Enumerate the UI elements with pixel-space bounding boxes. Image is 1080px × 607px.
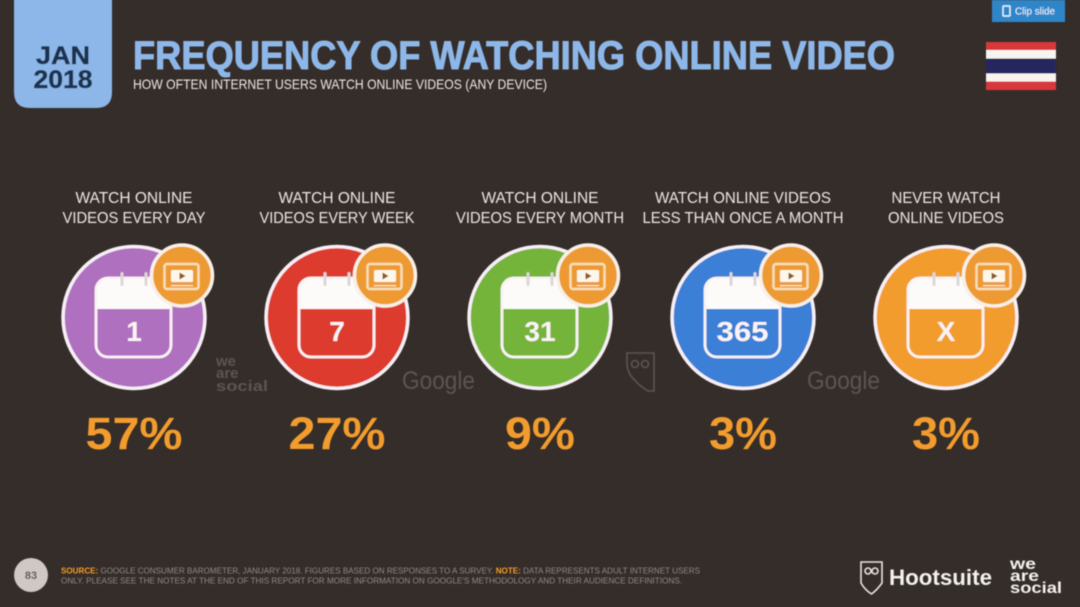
watermark: we are social: are (216, 365, 239, 382)
label: never: NEVER WATCH (892, 190, 1000, 207)
date tab: JAN (36, 42, 90, 70)
column: never (875, 190, 1024, 459)
watermark: owl shield (627, 353, 654, 391)
page number: 83 (25, 570, 37, 582)
date tab: 2018 (34, 66, 93, 94)
value: 9%: 9% (505, 408, 575, 459)
column: every day: VIDEOS EVERY DAY (62, 210, 206, 227)
value: 3%: 3% (709, 408, 777, 459)
label: every week: WATCH ONLINE (278, 190, 396, 207)
logo: Hootsuite: Hootsuite (889, 565, 992, 590)
logo: Hootsuite (861, 562, 992, 594)
icon: Thailand flag (986, 42, 1056, 90)
column: never: ONLINE VIDEOS (888, 210, 1004, 227)
clip slide button (992, 0, 1065, 22)
source note (61, 566, 700, 586)
subtitle: HOW OFTEN INTERNET USERS WATCH ONLINE VIDEOS (ANY DEVICE) (133, 76, 547, 92)
source note: SOURCE: GOOGLE CONSUMER BAROMETER, JANUARY 2018. FIGURES BASED ON RESPONSES TO A SURVEY. NOTE: DATA REPRESENTS ADULT INTERNET USERS (61, 566, 700, 576)
icon: orange calendar X: X (937, 316, 956, 347)
column: every day (62, 190, 212, 459)
clip slide button: Clip slide (1015, 6, 1055, 18)
watermark: we are social: social (216, 378, 268, 395)
watermark: we are social (215, 353, 268, 395)
icon: blue calendar 365: 365 (716, 316, 768, 347)
page number (14, 558, 48, 592)
icon: blue calendar 365 (672, 245, 822, 388)
value: 57%: 57% (86, 408, 182, 459)
column: less than once a month: LESS THAN ONCE A MONTH (642, 210, 844, 227)
column: every month: VIDEOS EVERY MONTH (456, 210, 624, 227)
logo: we are social (1009, 556, 1062, 597)
logo: we are social: social (1010, 580, 1062, 597)
label: less than once a month: WATCH ONLINE VIDEOS (655, 190, 831, 207)
watermark: Google right: Google (807, 367, 880, 395)
icon: green calendar 31: 31 (524, 316, 556, 347)
watermark: we are social: we (215, 353, 236, 370)
logo: we are social: are (1010, 568, 1039, 585)
icon: purple calendar 1 (63, 245, 212, 388)
column: every week: VIDEOS EVERY WEEK (260, 210, 415, 227)
label: every day: WATCH ONLINE (76, 190, 192, 207)
icon: red calendar 7: 7 (329, 316, 345, 347)
column: every week (260, 190, 416, 459)
icon: orange calendar X (875, 245, 1024, 388)
icon: purple calendar 1: 1 (126, 316, 142, 347)
title: FREQUENCY OF WATCHING ONLINE VIDEO (133, 34, 895, 78)
icon: green calendar 31 (469, 245, 618, 388)
logo: we are social: we (1009, 556, 1036, 573)
source note: ONLY. PLEASE SEE THE NOTES AT THE END OF THIS REPORT FOR MORE INFORMATION ON GOOGLE'S METHODOLOGY AND THEIR AUDIENCE DEFINITIONS. (61, 576, 682, 586)
column: every month (456, 190, 624, 459)
column: less than once a month (642, 190, 844, 459)
date tab (14, 0, 112, 108)
value: 27%: 27% (288, 408, 386, 459)
icon: red calendar 7 (266, 245, 416, 388)
label: every month: WATCH ONLINE (482, 190, 598, 207)
value: 3%: 3% (912, 408, 980, 459)
watermark: Google left: Google (402, 367, 475, 395)
